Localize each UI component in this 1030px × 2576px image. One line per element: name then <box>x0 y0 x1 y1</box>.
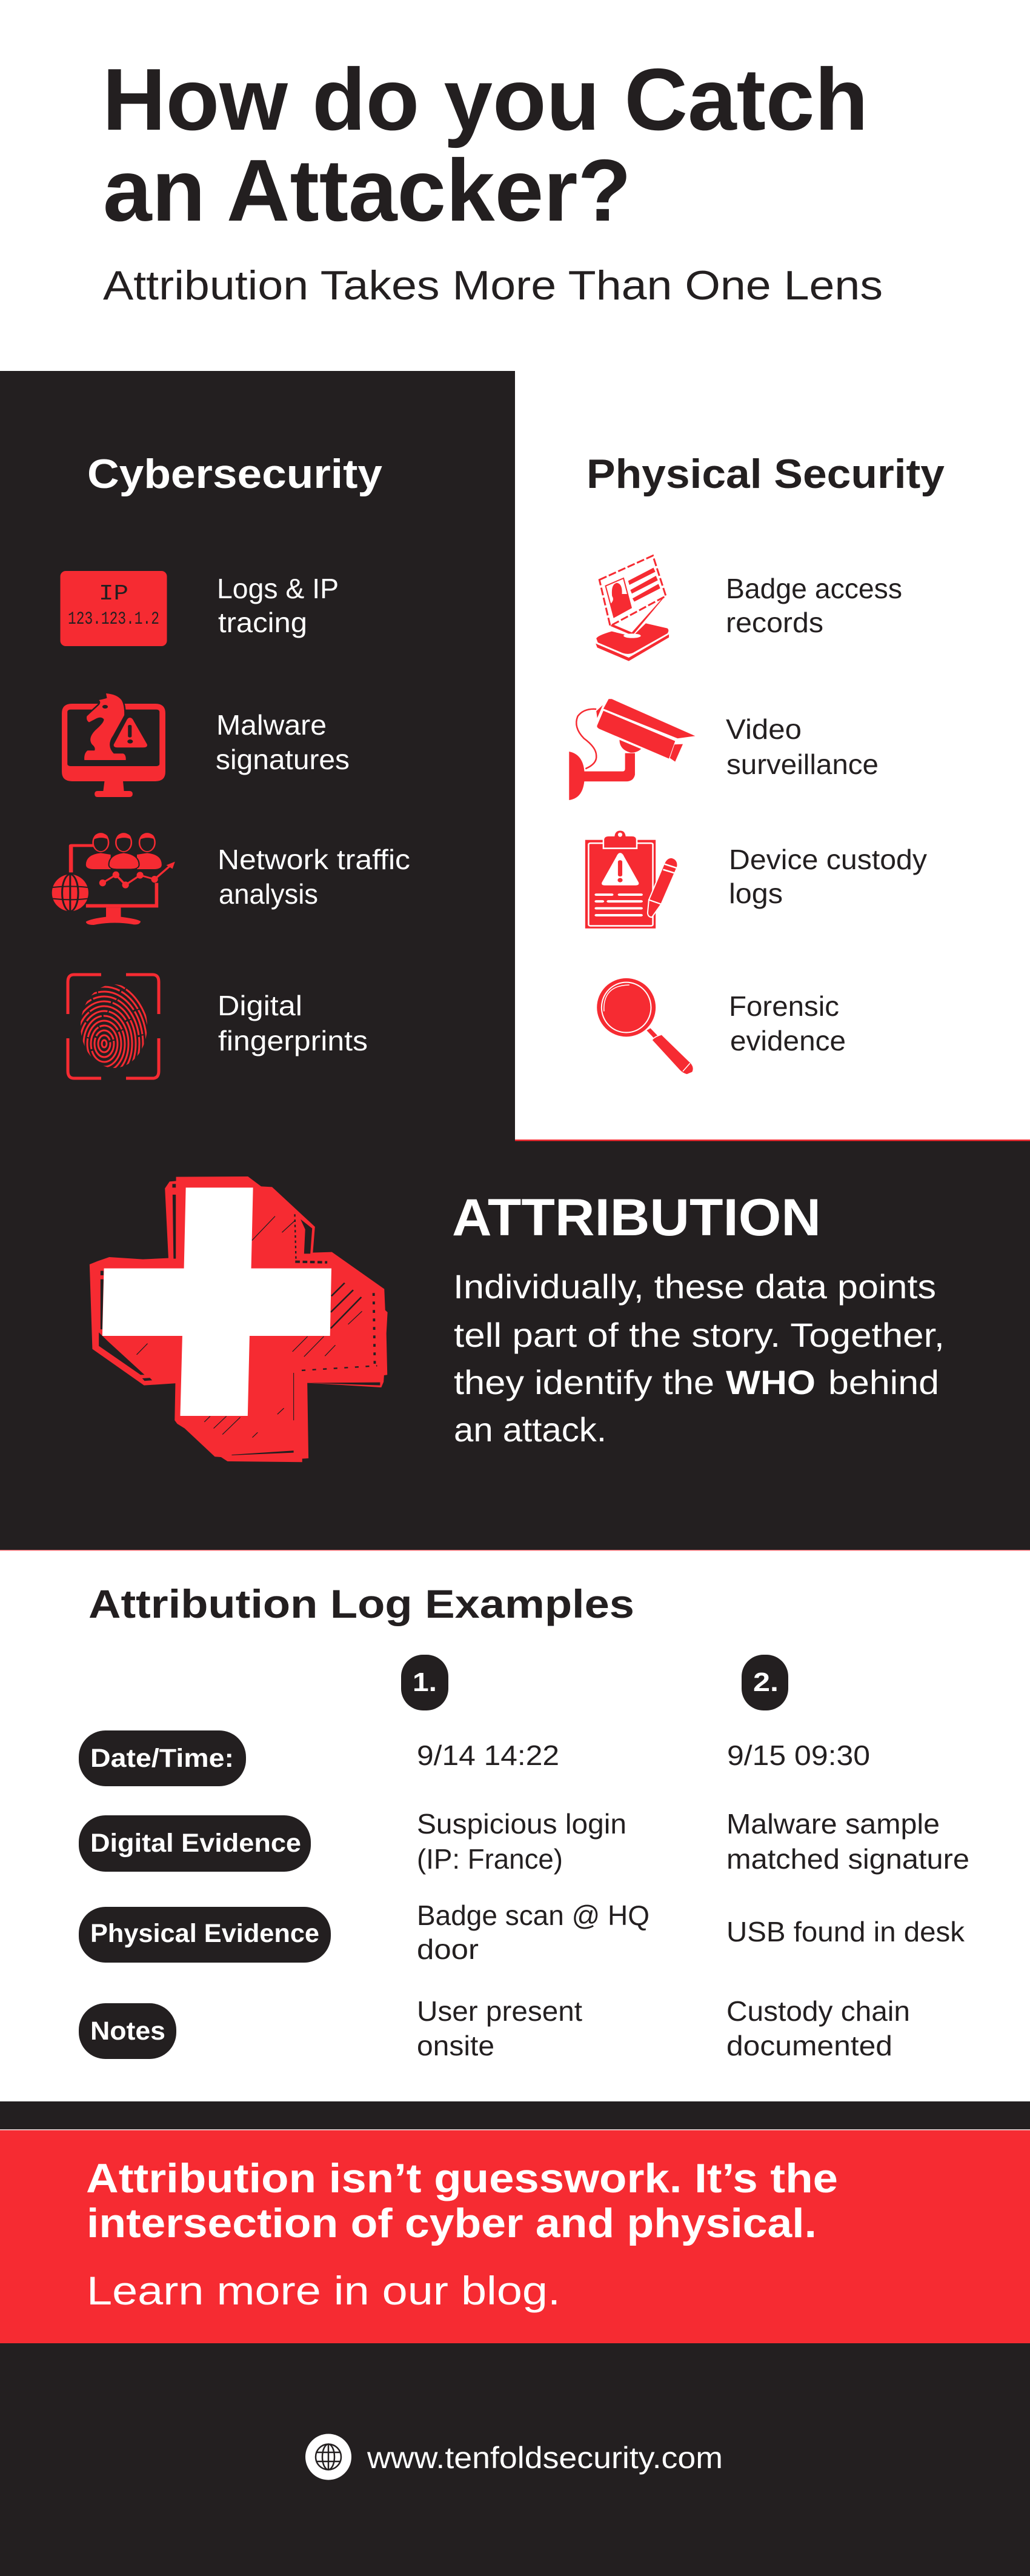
label: malware signatures: signatures <box>216 744 350 775</box>
icon: globe <box>305 2434 351 2480</box>
icon: IP address tag <box>61 571 167 646</box>
title <box>102 50 868 239</box>
text: learn more: Learn more in our blog. <box>87 2268 560 2313</box>
label: forensic evidence: Forensic <box>729 990 839 1022</box>
panel: footer <box>0 2343 1030 2576</box>
icon: magnifying glass <box>597 978 693 1074</box>
row label: date/time <box>79 1730 246 1786</box>
label: logs and IP tracing: tracing <box>218 607 307 638</box>
row values: physical evidence: door <box>417 1934 479 1965</box>
callout: key statement <box>86 2155 838 2246</box>
row values: notes: onsite <box>417 2030 494 2061</box>
label: digital fingerprints <box>218 990 368 1056</box>
title: an Attacker? <box>103 141 631 239</box>
label: malware signatures <box>216 709 350 775</box>
row values: notes: documented <box>726 2030 892 2061</box>
column badge 1: 1. <box>413 1667 437 1697</box>
label: logs and IP tracing: Logs & IP <box>217 573 339 604</box>
text block: attribution description: WHO <box>726 1363 816 1401</box>
row values: date/time: 9/14 14:22 <box>417 1740 559 1771</box>
panel: call to action <box>0 2101 1030 2343</box>
row values: digital evidence: Malware sample <box>726 1808 940 1840</box>
row values: date/time <box>417 1740 870 1771</box>
column badge 2 <box>742 1655 788 1710</box>
text block: attribution description: an attack. <box>454 1410 606 1449</box>
row values: digital evidence: Suspicious login <box>417 1808 626 1840</box>
label: digital fingerprints: Digital <box>218 990 302 1021</box>
title: How do you Catch <box>102 50 868 148</box>
row label: notes: Notes <box>90 2017 165 2046</box>
heading: log examples: Attribution Log Examples <box>88 1581 634 1626</box>
icon: sketched cross <box>90 1176 388 1462</box>
heading: cybersecurity: Cybersecurity <box>87 451 382 497</box>
row label: date/time: Date/Time: <box>90 1744 234 1773</box>
label: device custody logs <box>729 844 927 909</box>
row values: digital evidence <box>417 1808 969 1875</box>
label: video surveillance: Video <box>726 713 802 745</box>
label: logs and IP tracing <box>217 573 339 638</box>
row label: notes <box>79 2003 176 2059</box>
callout: key statement: Attribution isn’t guesswork. It’s the <box>86 2155 838 2201</box>
panel: header <box>0 0 1030 372</box>
column badge 1 <box>401 1655 448 1710</box>
icon: IP address tag: IP <box>99 581 128 606</box>
label: badge access records: records <box>726 607 823 638</box>
panel: physical security <box>515 371 1030 1140</box>
panel: attribution log examples <box>0 1550 1030 2101</box>
column badge 2: 2. <box>753 1667 779 1697</box>
label: badge access records <box>726 573 902 638</box>
heading: physical security: Physical Security <box>586 451 945 497</box>
row values: digital evidence: matched signature <box>726 1843 969 1875</box>
icon: badge access reader <box>596 556 669 661</box>
icon: network traffic analysis <box>52 833 175 925</box>
subtitle: Attribution Takes More Than One Lens <box>103 262 883 309</box>
label: network traffic analysis: analysis <box>219 878 318 910</box>
row values: notes: Custody chain <box>726 1995 910 2027</box>
row values: digital evidence: (IP: France) <box>417 1843 563 1875</box>
panel: cybersecurity <box>0 371 515 1141</box>
label: forensic evidence <box>729 990 846 1056</box>
row label: digital evidence: Digital Evidence <box>90 1829 301 1858</box>
callout: key statement: intersection of cyber and physical. <box>87 2200 817 2246</box>
icon: IP address tag: 123.123.1.2 <box>68 609 159 630</box>
label: video surveillance <box>726 713 879 780</box>
panel: attribution <box>0 1140 1030 1550</box>
row label: physical evidence <box>79 1907 331 1963</box>
label: network traffic analysis <box>218 844 410 910</box>
icon: surveillance camera <box>569 699 695 800</box>
row label: physical evidence: Physical Evidence <box>90 1919 319 1948</box>
label: digital fingerprints: fingerprints <box>218 1025 368 1056</box>
text: website url: www.tenfoldsecurity.com <box>367 2441 723 2475</box>
label: device custody logs: logs <box>729 878 783 909</box>
icon: digital fingerprint <box>67 973 160 1080</box>
row values: physical evidence <box>417 1900 965 1965</box>
row values: physical evidence: Badge scan @ HQ <box>417 1900 650 1931</box>
text block: attribution description: behind <box>828 1363 939 1401</box>
label: video surveillance: surveillance <box>726 749 879 780</box>
text block: attribution description <box>453 1267 945 1449</box>
row values: notes: User present <box>417 1995 582 2027</box>
icon: malware monitor <box>62 693 165 797</box>
heading: attribution: ATTRIBUTION <box>452 1189 821 1247</box>
label: network traffic analysis: Network traffic <box>218 844 410 875</box>
label: badge access records: Badge access <box>726 573 902 604</box>
row label: digital evidence <box>79 1815 311 1872</box>
row values: physical evidence: USB found in desk <box>726 1916 965 1947</box>
row values: date/time: 9/15 09:30 <box>727 1740 870 1771</box>
text block: attribution description: tell part of the story. Together, <box>454 1316 945 1354</box>
label: device custody logs: Device custody <box>729 844 927 875</box>
label: malware signatures: Malware <box>216 709 327 741</box>
row values: notes <box>417 1995 910 2061</box>
icon: custody clipboard <box>585 830 677 929</box>
text block: attribution description: they identify the <box>454 1363 714 1401</box>
label: forensic evidence: evidence <box>730 1025 846 1056</box>
text block: attribution description: Individually, these data points <box>453 1267 936 1306</box>
